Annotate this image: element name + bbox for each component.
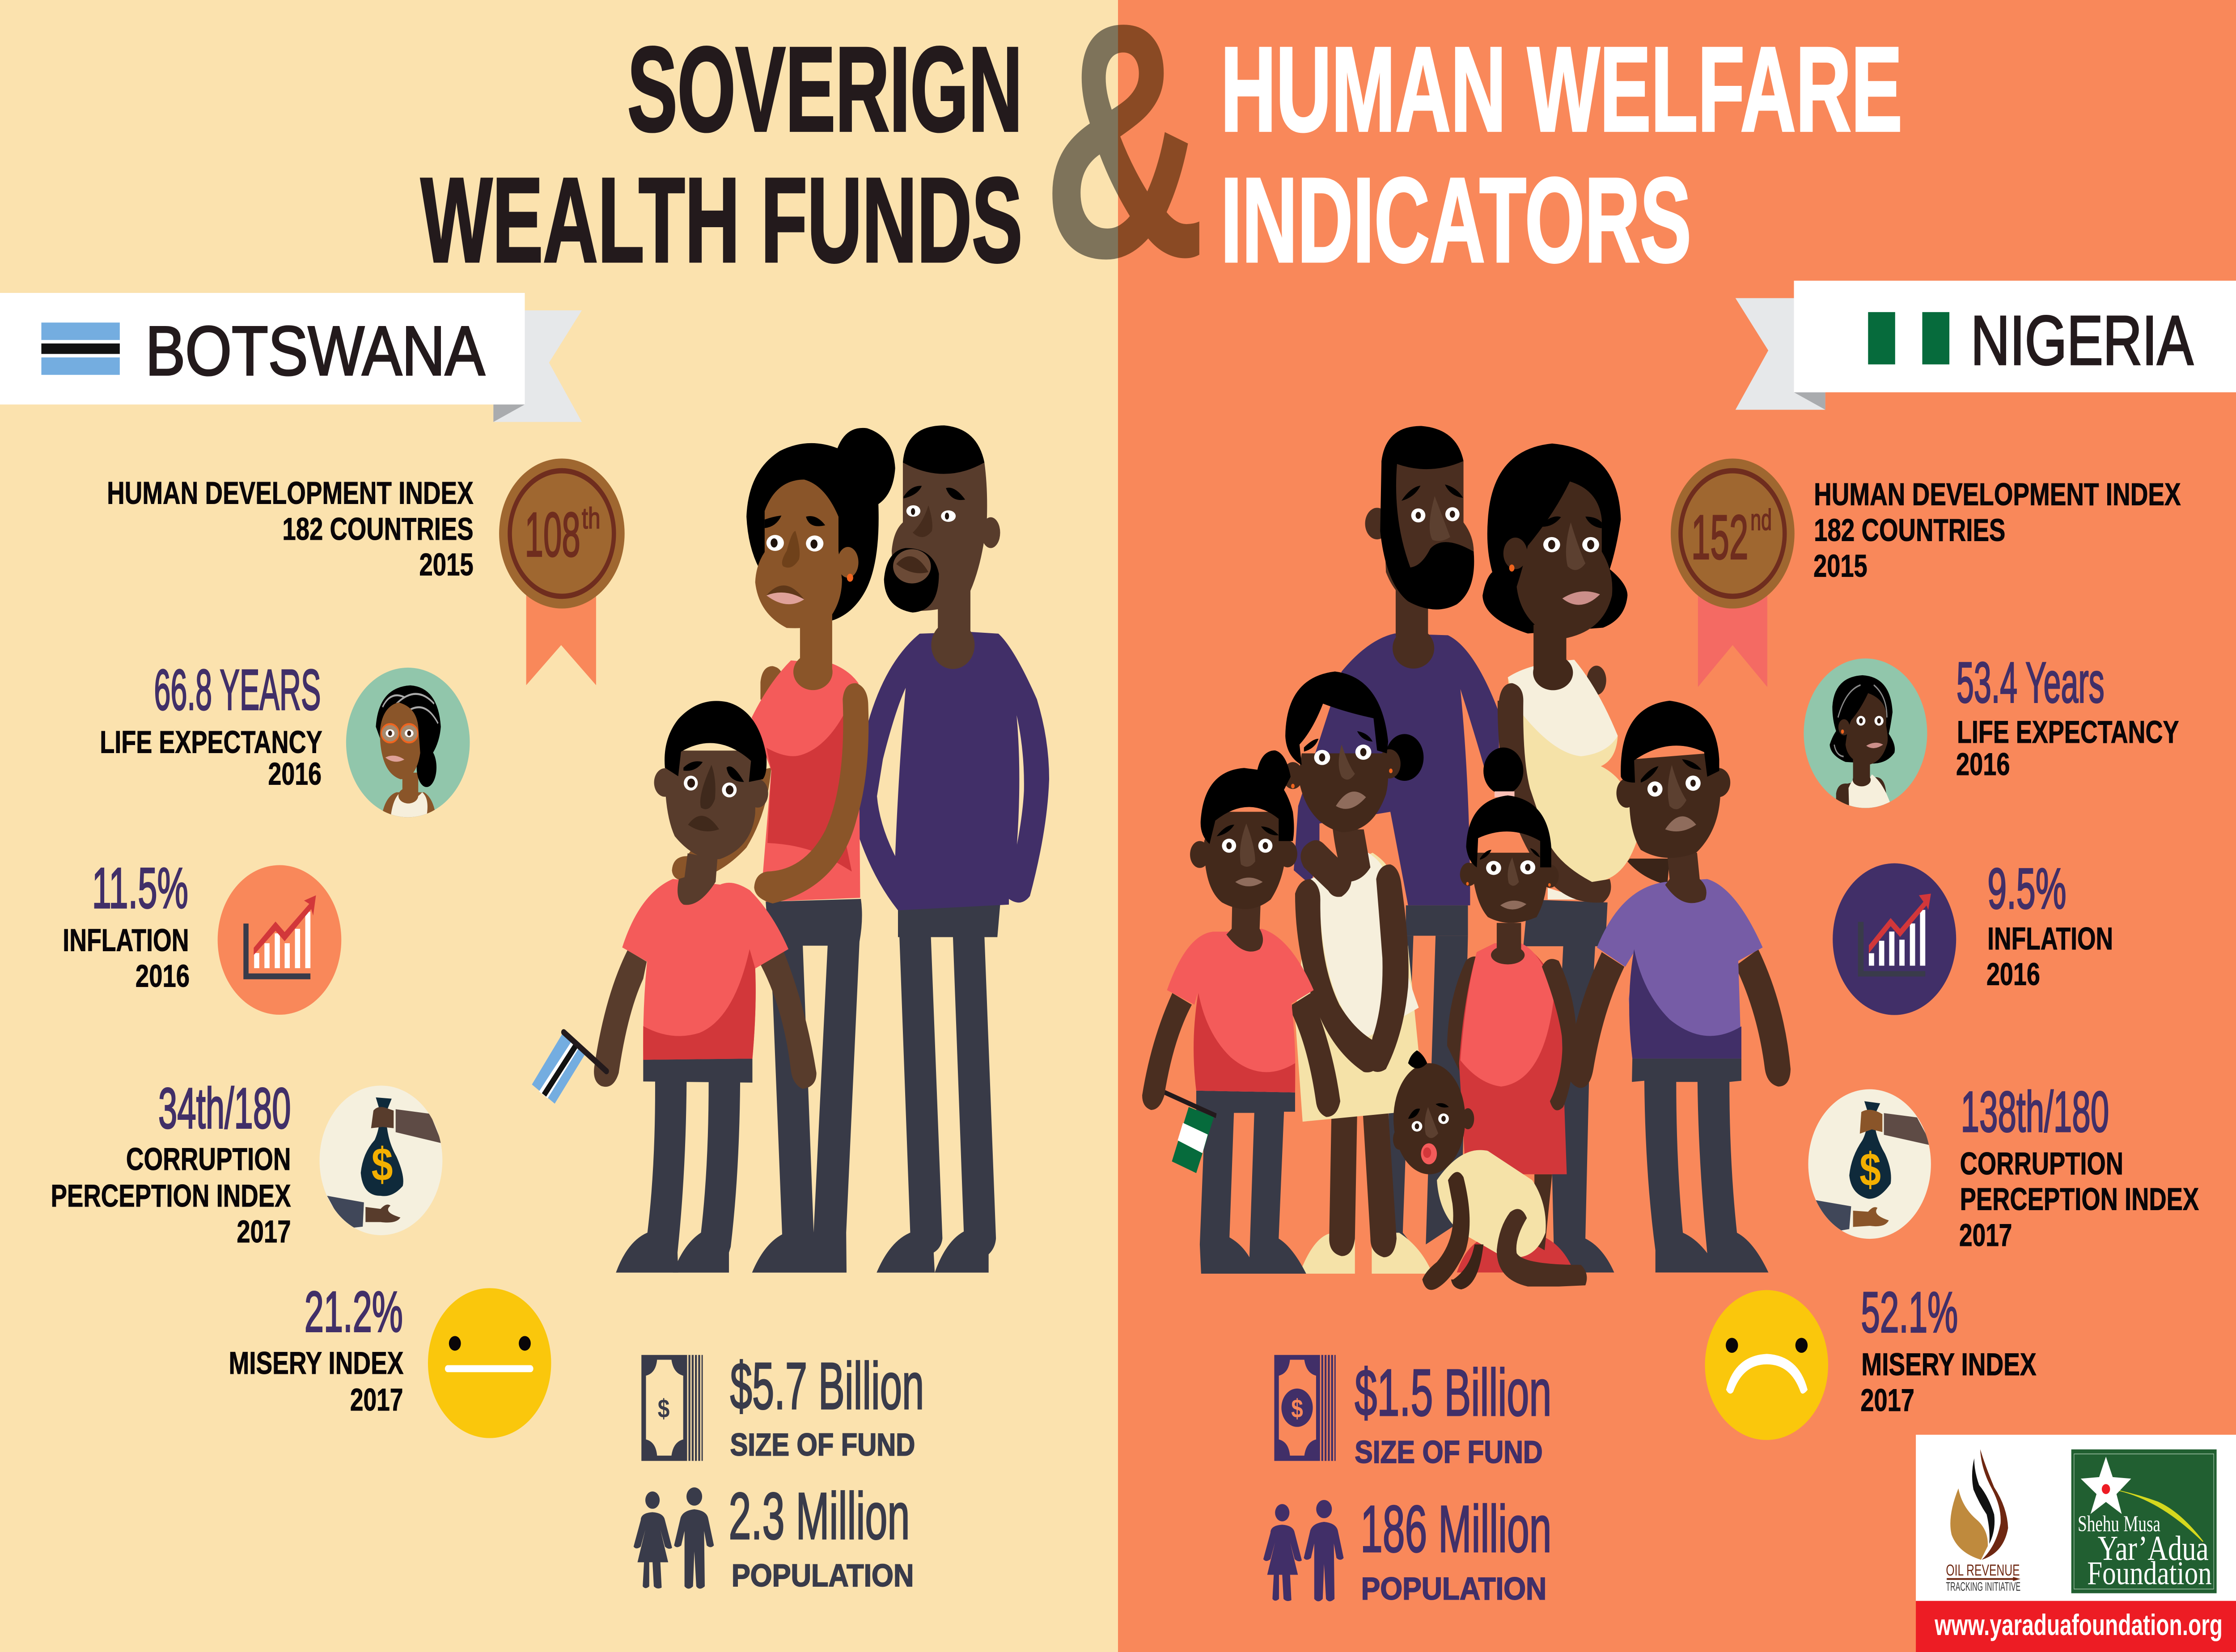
panel: Botswana human development index: 182 COUNTRIES [282,512,474,546]
title: INDICATORS [1221,153,1691,288]
panel: logos footer [1916,1435,2236,1652]
icon: money bag with hands [1808,1089,1932,1239]
icon: Botswana hand flag [532,1032,606,1104]
panel: Botswana fund and population: POPULATION [732,1558,914,1593]
icon: Botswana flag [41,322,120,375]
figure: father [855,425,1049,1273]
figure: little girl in red shirt [1142,750,1340,1274]
panel: Botswana fund and population: $5.7 Billion [730,1348,924,1423]
icon: bronze medal 108th: th [582,501,600,535]
panel: Nigeria life expectancy: 2016 [1956,746,2010,782]
panel: Botswana misery index: 2017 [350,1382,403,1417]
panel: Nigeria fund and population: SIZE OF FUND [1355,1435,1543,1470]
figure: mother [672,428,895,1273]
title: SOVERIGN [627,22,1022,157]
panel: Botswana misery index [229,1279,551,1438]
icon: banknote stack [641,1355,703,1461]
background: Botswana side [0,0,1118,1652]
banner: Nigeria [1736,281,2236,410]
figure: girl in red dress [1447,747,1576,1272]
panel: Nigeria inflation [1833,856,2113,1015]
icon: woman portrait [1804,658,1927,815]
panel: Nigeria misery index [1705,1280,2037,1440]
banner: Botswana [0,293,582,422]
icon: neutral face [428,1288,551,1438]
panel: Nigeria life expectancy [1804,650,2179,815]
panel: Nigeria fund and population: $1.5 Billion [1355,1355,1551,1430]
panel: Botswana fund and population [634,1348,924,1593]
figure: older boy in purple shirt [1567,701,1791,1272]
panel: Nigeria misery index: 52.1% [1861,1280,1958,1344]
icon: bronze medal 108th: 108 [525,500,580,570]
panel: Nigeria fund and population: POPULATION [1361,1571,1546,1606]
icon: Nigeria hand flag [1165,1090,1217,1173]
panel: Nigeria life expectancy: 53.4 Years [1956,650,2105,715]
logo: Oil Revenue Tracking Initiative: TRACKING INITIATIVE [1946,1580,2020,1594]
icon: money bag with hands [320,1085,442,1235]
icon: two people [1263,1500,1344,1601]
icon: elderly woman portrait [346,668,470,832]
icon: bronze medal 152nd: 152 [1691,503,1748,572]
panel: Nigeria fund and population [1263,1355,1551,1606]
icon: bronze medal 152nd: nd [1750,503,1772,536]
panel: Botswana life expectancy: LIFE EXPECTANCY [100,724,322,760]
panel: Botswana human development index: HUMAN DEVELOPMENT INDEX [107,475,474,511]
illustration: Nigeria family [1142,426,1791,1290]
background: Nigeria side [1118,0,2236,1652]
panel: Nigeria corruption perception index [1808,1080,2199,1253]
panel: Botswana corruption perception index: CORRUPTION [126,1142,291,1177]
panel: Nigeria life expectancy: LIFE EXPECTANCY [1957,714,2179,750]
panel: Botswana misery index: MISERY INDEX [229,1346,404,1381]
icon: two people [634,1487,714,1589]
panel: Botswana corruption perception index: 34th/180 [158,1076,291,1140]
banner: Nigeria: NIGERIA [1971,302,2193,380]
panel: Nigeria misery index: 2017 [1860,1382,1914,1418]
panel: Botswana fund and population: SIZE OF FUND [730,1427,915,1462]
panel: Botswana life expectancy [101,667,470,818]
panel: Botswana misery index: 21.2% [305,1279,403,1344]
panel: Nigeria corruption perception index: 138th/180 [1961,1080,2109,1144]
panel: Botswana inflation: 2016 [136,958,190,994]
website strip [1916,1601,2236,1652]
panel: Nigeria inflation: 9.5% [1987,856,2067,921]
banner: Botswana: BOTSWANA [145,312,485,390]
title: WEALTH FUNDS [421,153,1022,288]
icon: banknote stack with coin: $ [1291,1394,1303,1423]
panel: Nigeria misery index: MISERY INDEX [1861,1347,2037,1382]
panel: Nigeria inflation: 2016 [1986,957,2040,992]
icon: banknote stack with coin [1274,1355,1336,1461]
panel: Nigeria human development index: HUMAN DEVELOPMENT INDEX [1814,477,2181,512]
logo: Shehu Musa Yar'Adua Foundation: Shehu Musa [2078,1512,2160,1537]
icon: sad face [1705,1290,1828,1440]
panel: Botswana life expectancy: 66.8 YEARS [154,658,321,722]
icon: bronze medal 152nd [1671,458,1795,687]
panel: Botswana fund and population: 2.3 Million [728,1478,910,1553]
logo: Oil Revenue Tracking Initiative: OIL REVENUE [1946,1561,2020,1579]
panel: Botswana corruption perception index: 2017 [237,1214,291,1249]
panel: Nigeria corruption perception index: PERCEPTION INDEX [1960,1182,2199,1217]
panel: Nigeria human development index: 2015 [1813,548,1868,584]
icon: money bag with hands: $ [1859,1144,1881,1196]
panel: Botswana inflation [63,856,341,1015]
panel: Botswana human development index: 2015 [419,547,474,582]
logo: Oil Revenue Tracking Initiative [1946,1449,2020,1594]
icon: rising chart on orange circle [218,865,341,1015]
icon: money bag with hands: $ [372,1138,393,1190]
figure: mother [1482,444,1639,1272]
panel: Nigeria corruption perception index: 2017 [1959,1218,2012,1253]
panel: Botswana inflation: INFLATION [63,923,189,958]
icon: banknote stack: $ [658,1394,669,1423]
figure: girl in cream dress [1283,672,1432,1274]
illustration: Botswana family [594,425,1049,1273]
panel: Nigeria inflation: INFLATION [1987,921,2113,957]
figure: father [1294,426,1499,1274]
figure: son [594,701,817,1273]
panel: Nigeria corruption perception index: CORRUPTION [1960,1146,2123,1181]
title: HUMAN WELFARE [1221,22,1902,157]
panel: Nigeria human development index: 182 COUNTRIES [1814,513,2005,548]
icon: rising chart on purple circle [1833,863,1956,1015]
panel: Nigeria fund and population: 186 Million [1360,1491,1551,1566]
panel: Botswana human development index [107,458,625,685]
logo: Shehu Musa Yar'Adua Foundation [2071,1449,2217,1593]
panel: Botswana inflation: 11.5% [92,856,188,920]
panel: Botswana life expectancy: 2016 [268,756,322,792]
figure: baby [1393,1051,1587,1290]
logo: Shehu Musa Yar'Adua Foundation: Foundation [2087,1555,2212,1592]
title [421,0,1902,327]
panel: Botswana corruption perception index [51,1076,442,1249]
icon: bronze medal 108th [499,458,625,685]
panel: Botswana corruption perception index: PERCEPTION INDEX [51,1178,291,1213]
panel: Nigeria human development index [1671,458,2181,687]
logo: Shehu Musa Yar'Adua Foundation: Yar’Adua [2098,1529,2209,1567]
icon: Nigeria flag [1868,312,1949,364]
